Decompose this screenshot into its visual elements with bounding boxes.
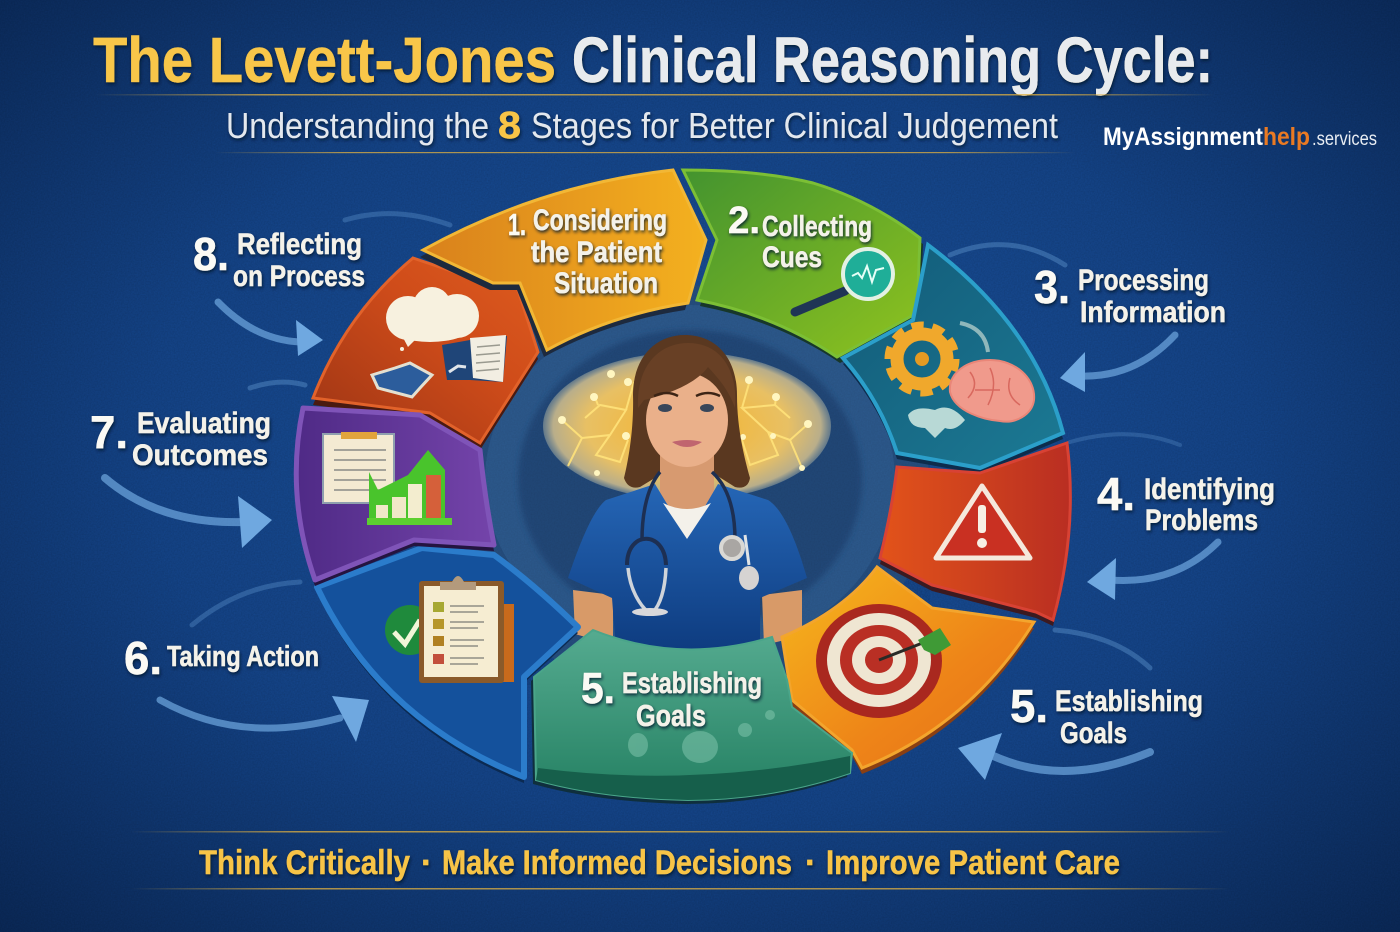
segment 2 label [728, 200, 872, 274]
icon: thought cloud [386, 287, 479, 351]
label 4: identifying problems [1097, 468, 1275, 537]
label 6: taking action: 6. [124, 632, 162, 684]
nurse fringe [638, 343, 735, 408]
logo: .services [1312, 129, 1377, 150]
label 5: establishing goals: Goals [1060, 717, 1127, 750]
footer tagline: · [421, 844, 432, 882]
arrows 6 [160, 582, 369, 742]
stethoscope [627, 472, 759, 616]
footer tagline: Improve Patient Care [826, 844, 1120, 882]
arrows 4 [1070, 434, 1218, 600]
label 3: processing information [1034, 261, 1226, 329]
icon: clipboard [419, 576, 514, 683]
ring segment 6: taking action [317, 548, 578, 783]
icon: check badge [385, 605, 435, 655]
inner circle backdrop [450, 285, 930, 695]
nurse undershirt [663, 503, 711, 539]
footer tagline: Make Informed Decisions [442, 844, 792, 882]
nurse arms [573, 590, 802, 645]
subtitle: 8 [498, 105, 521, 147]
nurse face [646, 373, 728, 467]
segment 5 label [581, 664, 762, 733]
ring segment 3: processing information [843, 245, 1063, 474]
nurse [568, 335, 807, 650]
icon: growth chart [367, 450, 452, 525]
subtitle: Stages for Better Clinical Judgement [531, 105, 1058, 146]
subtitle [215, 105, 1075, 153]
nurse hair back [624, 335, 750, 488]
label 4: identifying problems: Problems [1145, 504, 1258, 537]
ring segment 7: evaluating outcomes [296, 408, 494, 586]
label 5: establishing goals [1010, 680, 1203, 750]
label 3: processing information: Processing [1078, 264, 1209, 297]
segment 1 label: the Patient [531, 236, 662, 269]
label 6: taking action: Taking Action [167, 641, 319, 673]
icon: gear [889, 326, 955, 392]
segment 2 label: Cues [762, 241, 822, 274]
footer tagline [130, 831, 1230, 890]
arrows 5 [958, 630, 1150, 780]
segment 1 label: Situation [554, 267, 658, 300]
logo [1103, 123, 1377, 151]
nurse neck [660, 450, 714, 530]
glowing neural network [543, 352, 831, 500]
footer tagline: · [805, 844, 816, 882]
label 5: establishing goals: Establishing [1055, 685, 1203, 718]
arrows 8 [218, 214, 450, 356]
ring segment 4: identifying problems [880, 443, 1070, 626]
label 3: processing information: 3. [1034, 261, 1070, 313]
segment 2 label: 2. [728, 200, 760, 242]
segment 1 label: 1. [508, 207, 526, 242]
label 5: establishing goals: 5. [1010, 680, 1048, 732]
label 8: reflecting on process: Reflecting [237, 228, 362, 261]
segment 2 label: Collecting [762, 211, 872, 243]
ring segment 1: considering the patient situation [420, 170, 706, 357]
segment 5 label: Goals [636, 698, 706, 733]
title: Clinical Reasoning Cycle: [572, 24, 1213, 96]
ring segment 5: establishing goals [531, 630, 852, 804]
arrows 3 [950, 245, 1175, 392]
segment 5 label: Establishing [622, 667, 762, 700]
label 7: evaluating outcomes: 7. [90, 406, 128, 458]
icon: blue object [372, 363, 432, 397]
icon: open book [442, 335, 507, 382]
title [93, 24, 1215, 96]
nurse facial features [654, 393, 720, 447]
icon: magnifier [795, 249, 893, 312]
title: The Levett-Jones [93, 24, 556, 96]
label 6: taking action [124, 632, 319, 684]
logo: help [1263, 123, 1310, 151]
label 4: identifying problems: 4. [1097, 468, 1135, 520]
icon: swirl arrow [960, 323, 988, 352]
segment 5 label: 5. [581, 664, 615, 713]
ring segment 8: reflecting [313, 258, 538, 450]
nurse scrubs [568, 484, 807, 650]
arrows 7 [105, 382, 305, 548]
subtitle: Understanding the [226, 105, 489, 146]
label 8: reflecting on process [193, 228, 365, 293]
label 7: evaluating outcomes: Outcomes [132, 439, 268, 472]
icon: warning triangle [936, 486, 1030, 558]
label 8: reflecting on process: 8. [193, 228, 229, 280]
footer tagline: Think Critically [199, 844, 410, 882]
label 7: evaluating outcomes: Evaluating [137, 407, 271, 440]
label 4: identifying problems: Identifying [1144, 473, 1275, 506]
logo: MyAssignment [1103, 123, 1264, 151]
icon: target [816, 604, 951, 718]
ring segment 5: target [782, 567, 1034, 774]
icon: pale speech cloud [908, 408, 965, 438]
label 8: reflecting on process: on Process [233, 260, 365, 293]
icon: brain [950, 360, 1034, 422]
segment 1 label: Considering [533, 204, 667, 237]
icon: document [323, 432, 394, 503]
label 3: processing information: Information [1080, 296, 1226, 329]
ring segment 2: collecting cues [683, 170, 923, 363]
segment 1 label [508, 204, 667, 300]
label 7: evaluating outcomes [90, 406, 271, 472]
